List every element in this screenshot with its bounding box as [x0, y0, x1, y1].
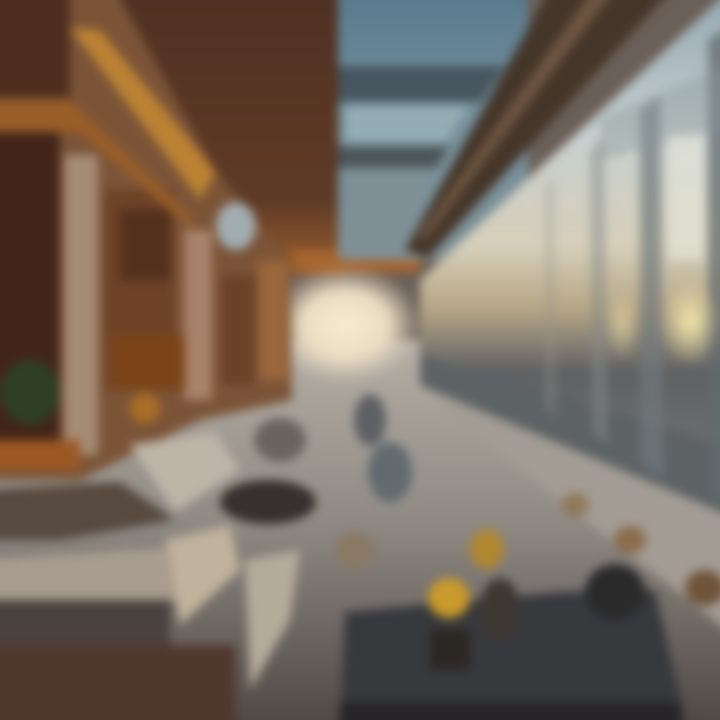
dark roof beam [405, 0, 680, 258]
sun reflections [660, 278, 720, 366]
orange beams [0, 28, 216, 470]
seating: left sofas and tables [0, 418, 316, 720]
left wall [0, 0, 292, 480]
plant [0, 360, 60, 424]
central glow [267, 265, 423, 385]
window mullions [545, 20, 720, 510]
yellow accents [428, 529, 504, 618]
right windows [420, 0, 720, 640]
ceiling: wood panels [100, 0, 420, 275]
central figures and tables [335, 394, 720, 720]
floor [0, 340, 720, 720]
bottom edge [340, 702, 680, 720]
skylight [338, 0, 528, 260]
distant window blob [216, 202, 256, 250]
